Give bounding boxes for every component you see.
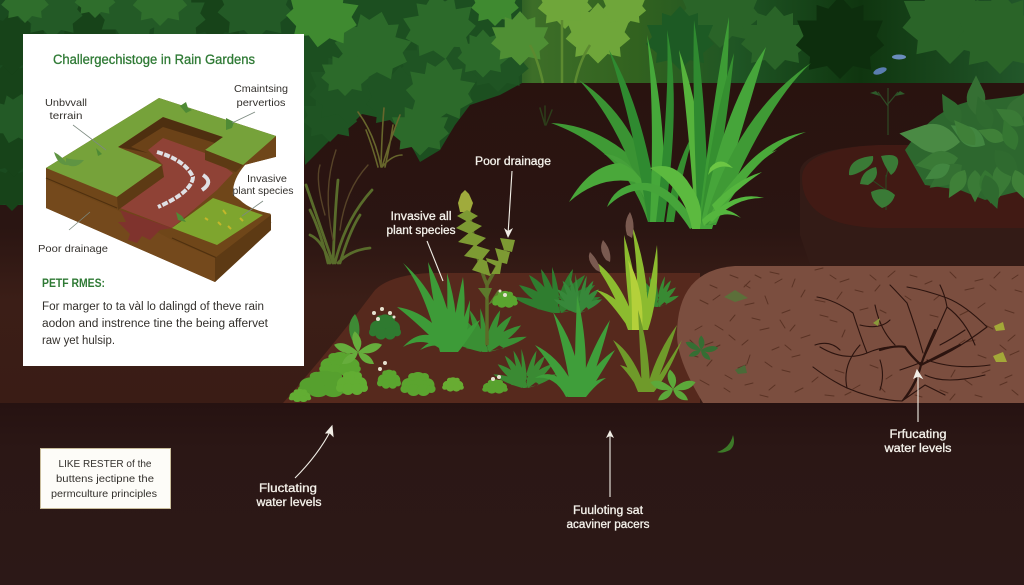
callout labels [38,83,294,255]
panel title: Challergechistoge in Rain Gardens [53,52,255,67]
label: poor drainage: Poor drainage [475,156,551,168]
heart leaves [849,155,898,210]
label: fluctuating water levels left: Fluctating [259,483,317,495]
label: fluctuating water levels left: water levels [255,497,322,509]
underground leaf [717,435,734,453]
panel: rain garden challenges [23,34,304,366]
callout labels: Poor drainage [38,243,108,255]
callout labels: Invasive [247,173,287,185]
raised bed: upper right [800,145,1024,265]
shrub upper right [897,75,1024,212]
background foliage canopy [0,0,1024,211]
callout labels: terrain [50,110,83,122]
big iris plants [551,17,811,229]
small leaves on block [54,152,84,166]
callout labels: pervertios [236,97,286,109]
mulch small leaves [683,290,1007,374]
background faded plants [306,106,552,263]
callout labels: plant species [232,185,294,197]
tree-like roots / cracks [813,285,990,401]
callout labels: Unbvvall [45,97,87,109]
stone path [157,152,193,207]
white cut-out [233,150,304,214]
label: fluctuating water levels right: Frfucating [890,429,946,441]
callout lines [69,112,263,230]
main planted bed [283,273,700,403]
label: fluctuating water levels right: water levels [883,443,952,455]
note box: LIKE RESTER of the [58,458,152,470]
small bushes and flowers [289,290,518,402]
background soil [0,83,1024,403]
label: fluctuating water levels left [255,426,333,509]
label: invasive plant species: Invasive all [390,211,452,223]
notes heading: PETF RMES: [42,278,105,290]
notes body [42,301,269,347]
note box: buttens jectipne the [56,473,154,485]
notes body: For marger to ta vàl lo dalingd of theve rain [42,301,264,313]
label: floating salt pacers [566,430,650,531]
label: floating salt pacers: Fuuloting sat [573,505,644,517]
ground surface line [0,403,1024,585]
note box: permculture principles [51,488,157,500]
tall invasive plant [456,190,515,345]
label: invasive plant species [386,211,456,281]
garden plants in bed [397,212,696,400]
note box [40,448,170,508]
label: floating salt pacers: acaviner pacers [566,519,650,531]
label: fluctuating water levels right [883,370,952,455]
notes body: aodon and instrence tine the being affervet [42,318,269,330]
terrain cross-section diagram [46,98,304,282]
callout labels: Cmaintsing [234,83,288,95]
mulch bed [677,266,1024,403]
label: poor drainage [475,156,551,238]
blue flower stem [870,54,906,135]
label: invasive plant species: plant species [386,225,456,237]
notes body: raw yet hulsip. [42,335,115,347]
